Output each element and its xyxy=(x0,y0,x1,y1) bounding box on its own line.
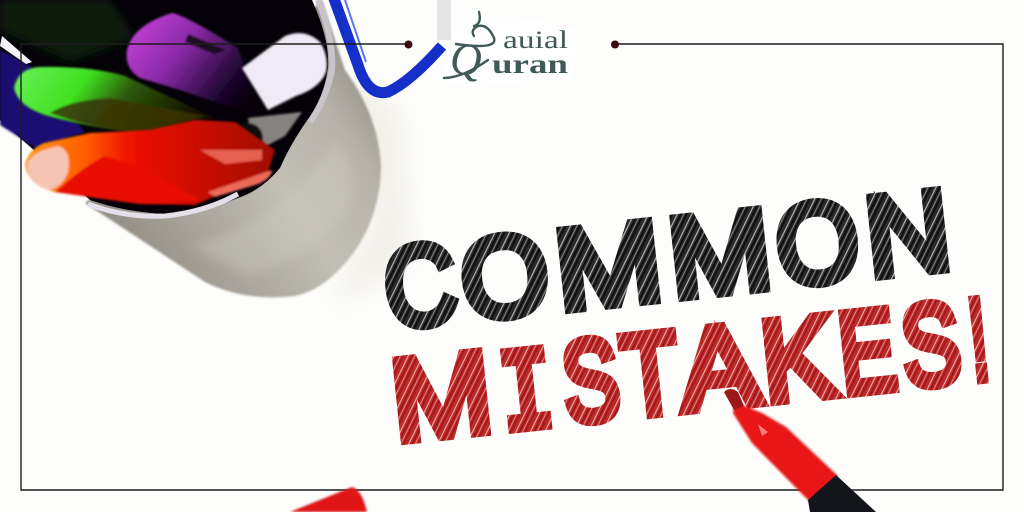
heading: MISTAKES!: S xyxy=(556,315,625,448)
cup body xyxy=(85,0,381,297)
white sliver xyxy=(0,36,32,64)
marker tip xyxy=(724,389,744,410)
logo backing xyxy=(440,16,576,88)
heading: COMMON: C xyxy=(378,219,462,352)
cup interior xyxy=(0,0,328,214)
grey pen with black tip xyxy=(233,112,302,153)
heading: MISTAKES!: I xyxy=(493,328,561,464)
navy pen xyxy=(0,50,85,148)
cup shadow xyxy=(330,70,410,310)
heading: MISTAKES!: S xyxy=(895,279,966,412)
purple pen xyxy=(127,13,262,118)
heading: MISTAKES!: ! xyxy=(963,276,994,405)
heading: MISTAKES!: E xyxy=(833,285,902,419)
heading: MISTAKES!: T xyxy=(616,308,685,441)
marker body xyxy=(733,402,838,502)
red and orange pen xyxy=(25,120,275,205)
heading: MISTAKES!: M xyxy=(385,328,498,466)
inner rim edge xyxy=(310,0,332,122)
heading: COMMON: N xyxy=(859,166,956,300)
heading: COMMON: O xyxy=(455,209,555,344)
logo xyxy=(440,12,576,88)
logo crescent mark xyxy=(444,12,494,78)
heading: MISTAKES!: K xyxy=(755,292,840,427)
green pen xyxy=(14,67,215,135)
illustration: metal cup with pens xyxy=(0,0,381,297)
marker black cap xyxy=(808,475,876,512)
logo wordmark bottom: uran xyxy=(492,49,568,79)
frame dot right xyxy=(611,40,619,48)
second red marker at bottom xyxy=(290,487,367,512)
cup brushed highlight xyxy=(190,140,353,275)
white pen cap xyxy=(242,33,327,110)
dark green pen in shadow xyxy=(0,0,135,62)
cup rim highlight xyxy=(88,194,238,216)
logo wordmark top: auial xyxy=(503,27,568,54)
frame dot left xyxy=(404,40,412,48)
red marker pointing at text xyxy=(724,389,876,512)
heading: COMMON: O xyxy=(770,176,865,310)
marker shine xyxy=(758,424,768,436)
heading: COMMON: M xyxy=(549,197,668,334)
logo letter Q: Q xyxy=(450,35,482,84)
heading: COMMON: M xyxy=(663,185,777,321)
heading: MISTAKES!: A xyxy=(674,300,765,435)
blue carabiner xyxy=(333,0,444,93)
